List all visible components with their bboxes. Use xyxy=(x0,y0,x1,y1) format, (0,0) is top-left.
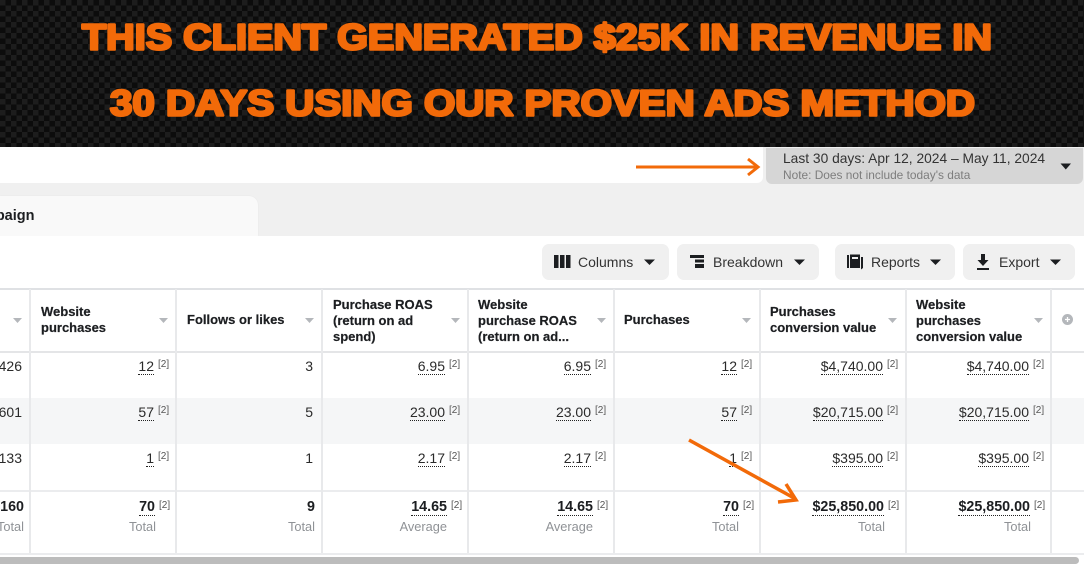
button: columns xyxy=(542,244,669,280)
data table: 14.65 xyxy=(411,499,447,515)
data table: 23.00 xyxy=(556,404,591,420)
data table: [2] xyxy=(158,451,169,462)
data table: [2] xyxy=(1033,451,1044,462)
data table: 23.00 xyxy=(410,404,445,420)
arrow: to total conversion value xyxy=(688,438,799,504)
sort carets xyxy=(13,314,1073,325)
data table: $395.00 xyxy=(832,450,883,466)
data table: 1 xyxy=(729,450,737,466)
data table: 57 xyxy=(138,404,154,420)
data table: [2] xyxy=(449,405,460,416)
data table: 12 xyxy=(721,358,737,374)
data table: $395.00 xyxy=(978,450,1029,466)
data table xyxy=(0,288,1084,555)
data table: 6.95 xyxy=(564,358,591,374)
button: breakdown: Breakdown xyxy=(713,254,783,270)
data table: $20,715.00 xyxy=(813,404,883,420)
data table: 6.95 xyxy=(418,358,445,374)
data table: 12 xyxy=(138,358,154,374)
data table: [2] xyxy=(741,405,752,416)
button: breakdown xyxy=(677,244,819,280)
data table: 1 xyxy=(305,450,313,466)
data table: $4,740.00 xyxy=(967,358,1029,374)
data table: purchase ROAS xyxy=(478,313,577,328)
data table: Total xyxy=(858,519,885,534)
data table: [2] xyxy=(1034,500,1045,511)
data table: $25,850.00 xyxy=(958,499,1030,515)
data table: (return on ad xyxy=(333,313,413,328)
data table: 2.17 xyxy=(418,450,445,466)
data table: Purchases xyxy=(624,312,690,327)
data table: Purchases xyxy=(770,304,836,319)
data table: [2] xyxy=(1033,405,1044,416)
top white bar xyxy=(0,147,763,183)
data table: Total xyxy=(712,519,739,534)
data table: [2] xyxy=(741,359,752,370)
data table: conversion value xyxy=(916,329,1022,344)
header banner with title: THIS CLIENT GENERATED $25K IN REVENUE IN xyxy=(82,16,992,58)
date range selector: Note: Does not include today's data xyxy=(783,168,970,182)
data table: 70 xyxy=(723,499,739,515)
data table: Website xyxy=(478,297,528,312)
data table: [2] xyxy=(449,359,460,370)
data table: 2.17 xyxy=(564,450,591,466)
data table: conversion value xyxy=(770,320,876,335)
column headers: purchases xyxy=(41,320,106,335)
data table: Follows or likes xyxy=(187,312,285,327)
data table: Average xyxy=(400,519,447,534)
data table: Website xyxy=(916,297,966,312)
data table: Total xyxy=(129,519,156,534)
button: reports: Reports xyxy=(871,254,920,270)
data table: [2] xyxy=(595,451,606,462)
header banner with title xyxy=(0,0,1084,147)
data table: [2] xyxy=(451,500,462,511)
button: reports xyxy=(835,244,955,280)
campaign tab xyxy=(0,196,258,236)
data table: [2] xyxy=(158,405,169,416)
data table: [2] xyxy=(888,500,899,511)
data table: [2] xyxy=(158,359,169,370)
data table: [2] xyxy=(595,359,606,370)
data table: [2] xyxy=(887,451,898,462)
column headers xyxy=(40,304,106,335)
data table: [2] xyxy=(1033,359,1044,370)
button: columns: Columns xyxy=(578,254,633,270)
header banner with title: 30 DAYS USING OUR PROVEN ADS METHOD xyxy=(110,82,975,124)
data table: spend) xyxy=(333,329,376,344)
data table: [2] xyxy=(595,405,606,416)
column headers: Website xyxy=(41,304,91,319)
data table: 3 xyxy=(305,358,313,374)
data table: [2] xyxy=(449,451,460,462)
data table: [2] xyxy=(741,451,752,462)
data table: [2] xyxy=(743,500,754,511)
data table: 57 xyxy=(721,404,737,420)
date range selector: Last 30 days: Apr 12, 2024 – May 11, 2024 xyxy=(783,151,1045,166)
data table: Purchase ROAS xyxy=(333,297,433,312)
date range selector xyxy=(766,148,1083,184)
data table: $25,850.00 xyxy=(812,499,884,515)
data table: 5 xyxy=(305,404,313,420)
data table: Total xyxy=(1004,519,1031,534)
data table: 1 xyxy=(146,450,154,466)
data table: 9 xyxy=(307,499,315,515)
toolbar background xyxy=(0,236,1084,289)
data table: Average xyxy=(546,519,593,534)
data table: purchases xyxy=(916,313,981,328)
data table: [2] xyxy=(159,500,170,511)
data table: 70 xyxy=(139,499,155,515)
data table: $20,715.00 xyxy=(959,404,1029,420)
data table: (return on ad... xyxy=(478,329,569,344)
horizontal scrollbar xyxy=(0,557,1079,564)
page background band xyxy=(0,147,1084,236)
data table: Total xyxy=(288,519,315,534)
data table: 14.65 xyxy=(557,499,593,515)
arrow: to date range xyxy=(636,158,760,176)
button: export xyxy=(963,244,1075,280)
data table: [2] xyxy=(597,500,608,511)
button: export: Export xyxy=(999,254,1039,270)
data table: [2] xyxy=(887,405,898,416)
data table: $4,740.00 xyxy=(821,358,883,374)
data table: [2] xyxy=(887,359,898,370)
totals row: 160 xyxy=(0,499,24,515)
